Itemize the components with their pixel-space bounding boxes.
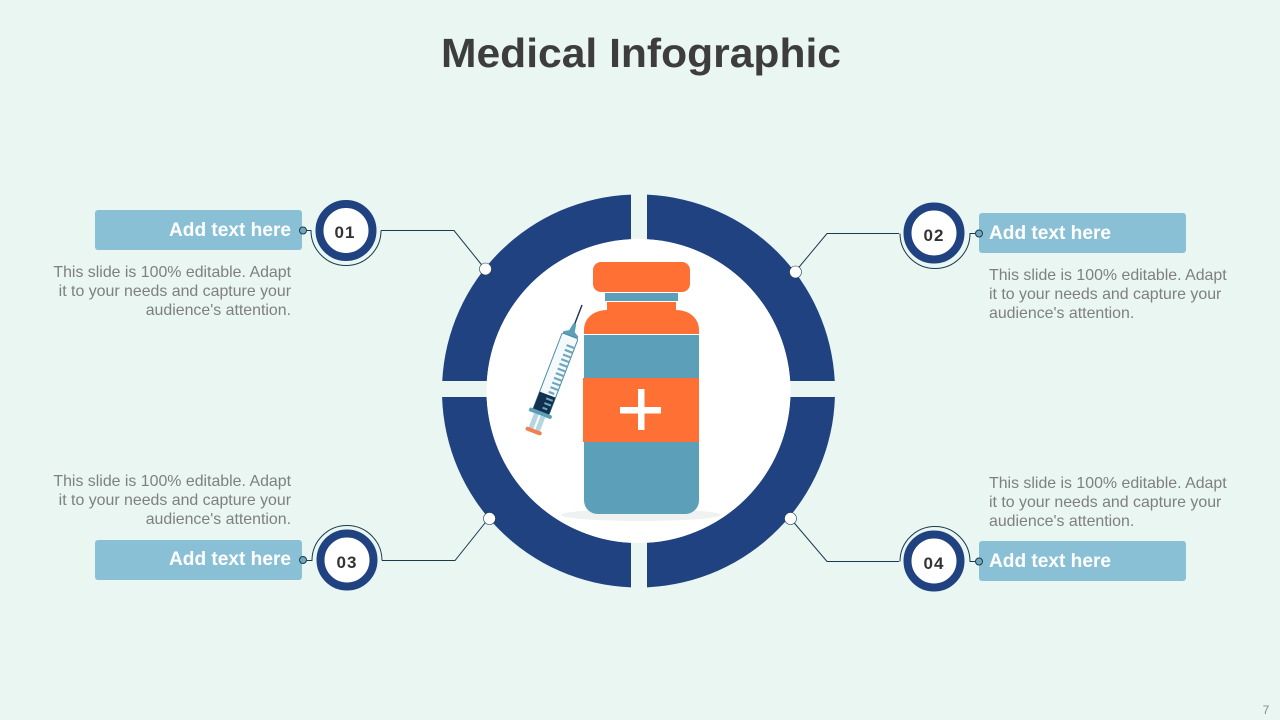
number badge 03 <box>307 526 382 586</box>
number badge 03: 03 <box>337 553 357 572</box>
ring node 01 <box>480 263 492 275</box>
ring segment: bottom right <box>647 397 835 587</box>
title: Medical Infographic <box>441 30 841 76</box>
ring node 04 <box>784 512 796 524</box>
description 01: it to your needs and capture your <box>59 283 292 300</box>
icon: syringe <box>522 301 593 437</box>
number badge 02 <box>900 206 975 268</box>
number badge 01 <box>307 204 381 266</box>
description 02: This slide is 100% editable. Adapt <box>989 267 1227 284</box>
ring node 03 <box>484 512 496 524</box>
label bar 01 <box>95 210 302 250</box>
page number: 7 <box>1263 703 1270 717</box>
number badge 02: 02 <box>924 226 944 245</box>
ring segment: bottom left <box>442 397 631 587</box>
callout 01 <box>53 204 492 319</box>
connector line 04 <box>790 518 899 562</box>
heading 02: Add text here <box>989 223 1111 244</box>
label bar 04 <box>979 541 1186 581</box>
heading 01: Add text here <box>169 220 291 241</box>
icon: medicine vial <box>561 262 721 521</box>
connector dot 03 <box>300 556 306 564</box>
heading 03: Add text here <box>169 549 291 570</box>
ring segment: top left <box>442 195 631 381</box>
description 04: it to your needs and capture your <box>989 494 1222 511</box>
callout 02 <box>790 206 1227 322</box>
callout 03 <box>53 473 496 586</box>
number badge 01: 01 <box>335 223 355 242</box>
white centre disc <box>486 239 790 543</box>
central ring diagram <box>442 195 835 587</box>
description 02: it to your needs and capture your <box>989 286 1222 303</box>
ring node 02 <box>790 266 802 278</box>
description 01: This slide is 100% editable. Adapt <box>53 264 292 281</box>
connector line 02 <box>795 234 899 272</box>
description 03: This slide is 100% editable. Adapt <box>53 473 292 490</box>
description 02: audience's attention. <box>989 305 1134 322</box>
callout 04 <box>784 475 1227 588</box>
description 03: it to your needs and capture your <box>59 492 292 509</box>
description 04: This slide is 100% editable. Adapt <box>989 475 1227 492</box>
connector dot 01 <box>300 227 306 234</box>
label bar 02 <box>979 213 1186 253</box>
description 03: audience's attention. <box>146 511 291 528</box>
connector line 01 <box>381 230 485 269</box>
description 01: audience's attention. <box>146 302 291 319</box>
ring segment: top right <box>647 195 835 381</box>
label bar 03 <box>95 540 302 580</box>
connector dot 04 <box>976 558 982 565</box>
connector line 03 <box>382 518 489 560</box>
number badge 04 <box>900 527 975 588</box>
connector dot 02 <box>976 230 982 237</box>
description 04: audience's attention. <box>989 513 1134 530</box>
heading 04: Add text here <box>989 551 1111 572</box>
number badge 04: 04 <box>924 554 944 573</box>
